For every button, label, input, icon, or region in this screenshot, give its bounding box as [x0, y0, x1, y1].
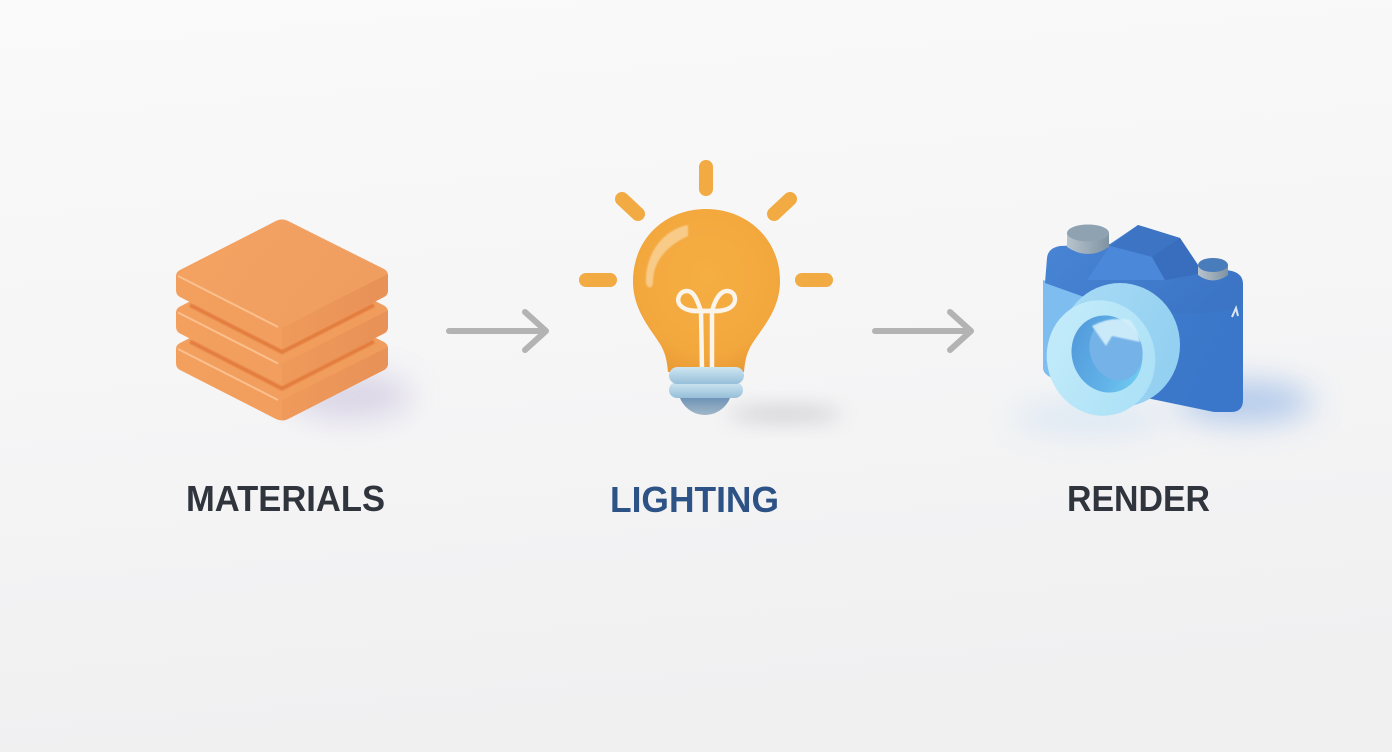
- lens barrel: [1060, 283, 1180, 407]
- filament: [678, 291, 735, 370]
- camera body upper: [1045, 225, 1243, 314]
- bulb glass: [633, 209, 780, 372]
- viewfinder faces: [1110, 225, 1180, 257]
- icon: camera: [1010, 224, 1313, 432]
- arrow: materials to lighting: [449, 312, 546, 350]
- base rings: [669, 382, 743, 398]
- label: lighting: LIGHTING: [610, 479, 779, 520]
- lens front ring: [1034, 288, 1168, 428]
- camera body lower: [1060, 295, 1243, 412]
- arrow: lighting to render: [875, 312, 971, 350]
- bottom slab: [176, 292, 388, 420]
- side strap clip: [1232, 308, 1238, 317]
- dial left: [1067, 224, 1109, 254]
- label: render: RENDER: [1067, 478, 1210, 519]
- dial right: [1198, 258, 1228, 280]
- contact shadows between slabs: [190, 305, 374, 388]
- middle slab: [176, 256, 388, 384]
- top slab: [176, 220, 388, 348]
- pale left panel: [1043, 280, 1100, 381]
- rays: [586, 167, 826, 280]
- label: materials: MATERIALS: [186, 478, 385, 519]
- icon: stacked material slabs: [176, 220, 412, 420]
- icon: light bulb: [586, 167, 843, 421]
- bulb highlight: [646, 225, 688, 287]
- lens glass: [1061, 305, 1153, 403]
